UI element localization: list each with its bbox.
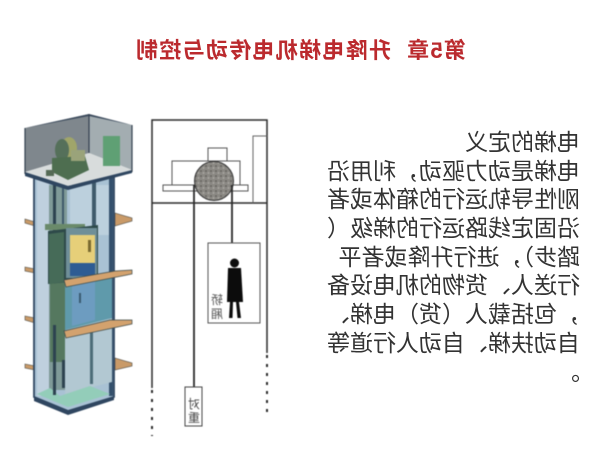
right machine-room box [253,136,267,203]
label: car: 厢 [211,305,223,322]
text block: elevator definition: 电梯的定义 [465,123,580,157]
diagram: elevator cutaway [24,113,134,416]
text block: elevator definition: 自动扶梯、自动人行道等 [327,324,580,358]
floor slab stubs behind the shaft [25,213,132,370]
motor housing [163,148,248,191]
machine room outline [152,120,267,388]
text block: elevator definition: 行送人、货物的机电设备 [327,266,580,300]
text block: elevator definition: ，包括载人（货）电梯、 [327,295,580,329]
counterweight and guide rails [45,185,85,395]
counterweight outline [185,387,202,426]
text block: elevator definition: 沿固定线路运行的梯级（ [327,209,580,243]
text block: elevator definition [327,123,580,386]
elevator shaft [34,176,114,415]
text block: elevator definition: 踏步），进行升降或者平 [338,238,580,272]
traction sheave [194,162,234,200]
label: car: 轿 [211,291,223,308]
label: counterweight: 对 [188,395,200,412]
dashed wall continuation [152,355,267,436]
title: 第5章 升降电梯机电传动与控制 [135,38,466,63]
traction machine [46,137,89,180]
elevator car outline [208,243,260,323]
passenger silhouette [227,258,243,318]
text block: elevator definition: 电梯是动力驱动，利用沿 [327,152,580,186]
control cabinet [103,136,120,166]
floor slabs [64,270,132,338]
label: counterweight: 重 [188,409,200,426]
elevator car with open door [48,225,98,284]
lower floor door [65,276,112,330]
hoist ropes [194,185,232,387]
text block: elevator definition: 。 [557,352,580,386]
machine room [25,114,132,190]
text block: elevator definition: 刚性导轨运行的箱体或者 [327,180,580,214]
